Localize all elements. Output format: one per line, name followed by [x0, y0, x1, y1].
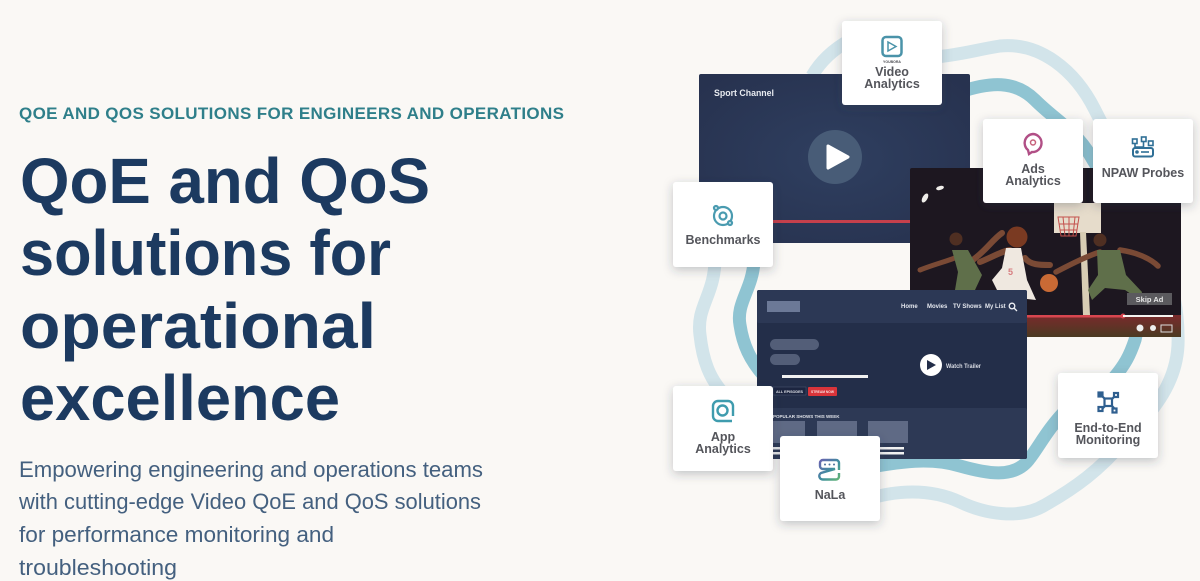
- player centre: [980, 226, 1050, 300]
- video player: basketball ad: [910, 168, 1181, 337]
- action buttons: [773, 387, 837, 396]
- skip ad button: Skip Ad: [1136, 295, 1164, 304]
- player controls: [1136, 324, 1172, 332]
- search icon: [1009, 303, 1017, 311]
- court lights: [920, 185, 944, 204]
- nav links: My List: [985, 304, 1006, 310]
- main title: solutions for: [20, 217, 391, 289]
- main title: excellence: [20, 362, 340, 434]
- eyebrow heading: QOE AND QOS SOLUTIONS FOR ENGINEERS AND OPERATIONS: [19, 104, 564, 123]
- nav links: TV Shows: [953, 304, 982, 310]
- action buttons: ALL EPISODES: [776, 389, 803, 394]
- player left: [920, 232, 1002, 290]
- main title: operational: [20, 290, 376, 362]
- watch trailer button: [920, 354, 982, 376]
- card: NaLa: [780, 436, 880, 521]
- icon: NaLa: [819, 460, 839, 480]
- card: NaLa: NaLa: [815, 488, 846, 502]
- description paragraph: for performance monitoring and: [19, 522, 334, 547]
- card: Benchmarks: Benchmarks: [685, 233, 761, 247]
- row caption: POPULAR SHOWS THIS WEEK: [773, 414, 840, 419]
- card: End-to-End Monitoring: [1058, 373, 1158, 458]
- icon: network: [1098, 392, 1118, 412]
- card: NPAW Probes: [1093, 119, 1193, 203]
- dark background ribbon: [739, 85, 1139, 473]
- watch trailer button: Watch Trailer: [946, 364, 982, 370]
- description paragraph: [18, 457, 483, 580]
- video player: Sport Channel: [699, 74, 970, 243]
- card: End-to-End Monitoring: End-to-End: [1074, 421, 1142, 435]
- skip ad button: [1127, 293, 1172, 305]
- card: Ads Analytics: Analytics: [1005, 174, 1061, 188]
- player right: [1056, 234, 1158, 300]
- icon: benchmarks: [714, 206, 732, 225]
- nav logo: [767, 301, 800, 312]
- card: App Analytics: Analytics: [695, 442, 751, 456]
- main title: QoE and QoS: [20, 145, 430, 217]
- icon: ads analytics: [1025, 134, 1042, 154]
- nav links: [901, 304, 1006, 310]
- description paragraph: Empowering engineering and operations teams: [19, 457, 483, 482]
- card: Ads Analytics: Ads: [1021, 162, 1045, 176]
- nav links: Movies: [927, 304, 948, 310]
- icon: probes: [1132, 137, 1153, 156]
- icon: app analytics: [713, 401, 733, 421]
- basketball: [1040, 274, 1058, 292]
- card: Video Analytics: Video: [875, 65, 909, 79]
- card: Video Analytics: YOUBORA: [883, 60, 901, 64]
- card: App Analytics: [673, 386, 773, 471]
- action buttons: STREAM NOW: [811, 389, 834, 394]
- main title: [20, 145, 430, 434]
- nav links: Home: [901, 304, 918, 310]
- card: Benchmarks: [673, 182, 773, 267]
- title placeholders: [770, 339, 819, 365]
- video player: Sport Channel: Sport Channel: [714, 88, 774, 99]
- light background ribbon: [699, 40, 1178, 514]
- card: Ads Analytics: [983, 119, 1083, 203]
- thumbnails: [773, 421, 908, 443]
- card: App Analytics: App: [711, 430, 736, 444]
- streaming interface: [757, 290, 1027, 459]
- description paragraph: with cutting-edge Video QoE and QoS solutions: [18, 489, 481, 514]
- icon: video analytics: [882, 37, 902, 56]
- progress band: [1027, 315, 1181, 337]
- card: End-to-End Monitoring: Monitoring: [1076, 433, 1140, 447]
- card: Video Analytics: Analytics: [864, 77, 920, 91]
- player centre: 5: [1008, 267, 1013, 277]
- backboard and hoop: [1054, 203, 1101, 315]
- text bars: [773, 447, 904, 454]
- description paragraph: troubleshooting: [19, 555, 177, 580]
- card: Video Analytics: [842, 21, 942, 105]
- card: NPAW Probes: NPAW Probes: [1102, 166, 1184, 180]
- rating bar: [782, 375, 868, 378]
